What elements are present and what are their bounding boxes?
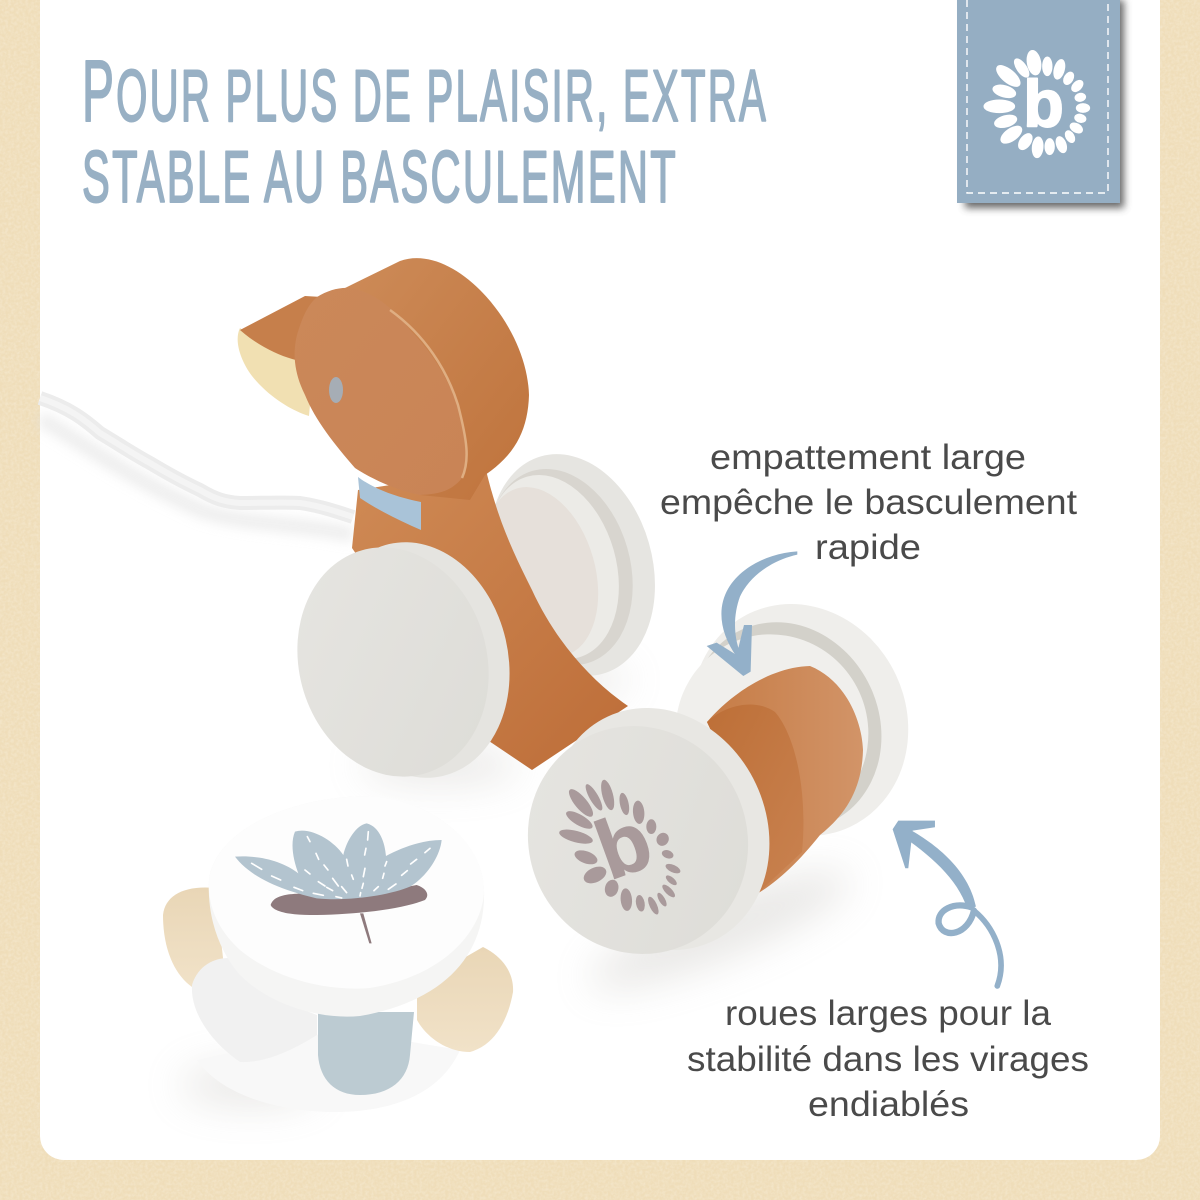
white lobe — [192, 958, 317, 1062]
wheel logo — [558, 778, 682, 916]
brand tag — [957, 0, 1124, 208]
blue cylinder — [318, 1012, 414, 1095]
front far wheel — [644, 568, 946, 872]
wheel logo: b — [584, 793, 663, 898]
base disc — [197, 1030, 460, 1112]
callout: wheelbase text: empêche le basculement — [660, 483, 1077, 522]
pull string — [40, 398, 353, 535]
rear far wheel — [464, 434, 680, 696]
icon: sunflower b logo — [984, 49, 1090, 158]
tan block right — [417, 947, 513, 1052]
flower toy — [163, 796, 513, 1112]
callout: wide wheels text: endiablés — [808, 1085, 969, 1124]
duck body — [352, 470, 628, 770]
callout: wheelbase text: rapide — [815, 528, 921, 567]
title: STABLE AU BASCULEMENT — [82, 137, 678, 218]
title — [82, 43, 768, 218]
callout: wide wheels text: stabilité dans les virages — [687, 1040, 1089, 1079]
soft ground shadows — [180, 664, 860, 1105]
callout: wheelbase text — [660, 438, 1077, 567]
duck head — [238, 258, 529, 530]
wood axle roller — [707, 666, 863, 894]
icon: sunflower b logo: b — [1023, 67, 1064, 141]
top disc — [209, 796, 484, 1017]
flower print — [235, 823, 442, 943]
head back edge — [345, 258, 529, 500]
callout: wheelbase text: empattement large — [710, 438, 1026, 477]
arrow: to inner wheel — [707, 551, 797, 676]
collar — [358, 477, 421, 530]
front near wheel — [491, 672, 808, 990]
beak — [238, 328, 315, 416]
callout: wide wheels text: roues larges pour la — [725, 994, 1052, 1033]
tan block left — [163, 887, 225, 987]
ear — [240, 296, 322, 362]
eye — [329, 377, 343, 403]
callout: wide wheels text — [687, 994, 1089, 1124]
head face — [295, 288, 467, 495]
arrow: curly to wide wheels — [893, 821, 1001, 986]
rear near wheel — [272, 523, 532, 798]
